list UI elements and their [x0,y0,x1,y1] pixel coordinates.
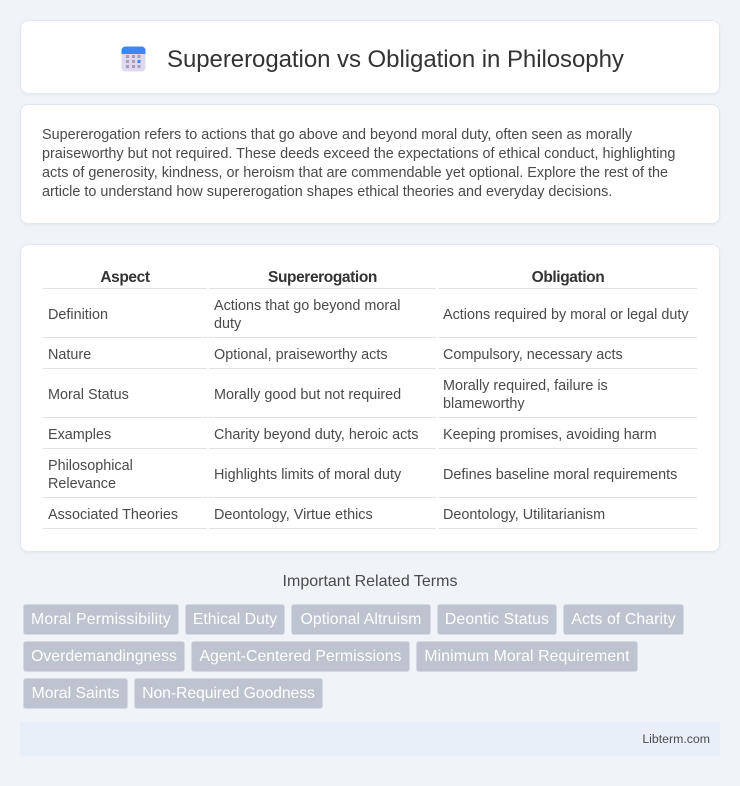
comparison table: Deontology, Virtue ethics [214,507,373,523]
comparison table: Nature [48,347,91,363]
intro text [42,127,675,200]
comparison table: Actions required by moral or legal duty [443,307,689,323]
comparison table: Definition [48,307,108,323]
footer bar [20,722,720,756]
icon: calendar [122,46,146,72]
header row: Supererogation [268,269,377,286]
related terms tags: Ethical Duty [193,611,277,628]
comparison table: Associated Theories [48,507,178,523]
header row: Obligation [532,269,604,286]
intro card [20,104,720,224]
comparison table [43,269,697,529]
intro text: article to understand how supererogation shapes ethical theories and everyday decisions. [42,184,612,200]
comparison table: Highlights limits of moral duty [214,467,401,483]
related terms tags: Acts of Charity [571,611,676,628]
title: Supererogation vs Obligation in Philosophy [167,46,624,73]
comparison table: Philosophical [48,458,133,474]
comparison table: Optional, praiseworthy acts [214,347,388,363]
comparison table: Actions that go beyond moral [214,298,400,314]
related terms tags: Moral Saints [32,685,119,702]
comparison table: duty [214,316,241,332]
comparison table: Morally required, failure is [443,378,608,394]
header card [20,20,720,94]
footer credit: Libterm.com [642,732,710,746]
related terms tags: Non-Required Goodness [142,685,315,702]
comparison table: Deontology, Utilitarianism [443,507,605,523]
table card [20,244,720,552]
header row [100,269,604,286]
comparison table: Moral Status [48,387,129,403]
related terms tags: Optional Altruism [300,611,422,628]
related terms tags: Moral Permissibility [31,611,171,628]
comparison table: Morally good but not required [214,387,401,403]
related terms tags: Minimum Moral Requirement [424,648,630,665]
related terms tags: Agent-Centered Permissions [200,648,401,665]
comparison table: Keeping promises, avoiding harm [443,427,657,443]
related terms tags [23,604,684,709]
intro text: Supererogation refers to actions that go above and beyond moral duty, often seen as morally [42,127,632,143]
intro text: acts of generosity, kindness, or heroism that are commendable yet optional. Explore the rest of the [42,165,668,181]
header row: Aspect [100,269,150,286]
related terms tags: Deontic Status [445,611,549,628]
related terms heading: Important Related Terms [283,573,457,590]
comparison table: Examples [48,427,111,443]
comparison table: blameworthy [443,396,525,412]
comparison table: Defines baseline moral requirements [443,467,677,483]
comparison table: Relevance [48,476,116,492]
comparison table: Charity beyond duty, heroic acts [214,427,419,443]
intro text: praiseworthy but not required. These deeds exceed the expectations of ethical conduct, highlighting [42,146,675,162]
related terms tags: Overdemandingness [31,648,177,665]
comparison table: Compulsory, necessary acts [443,347,623,363]
